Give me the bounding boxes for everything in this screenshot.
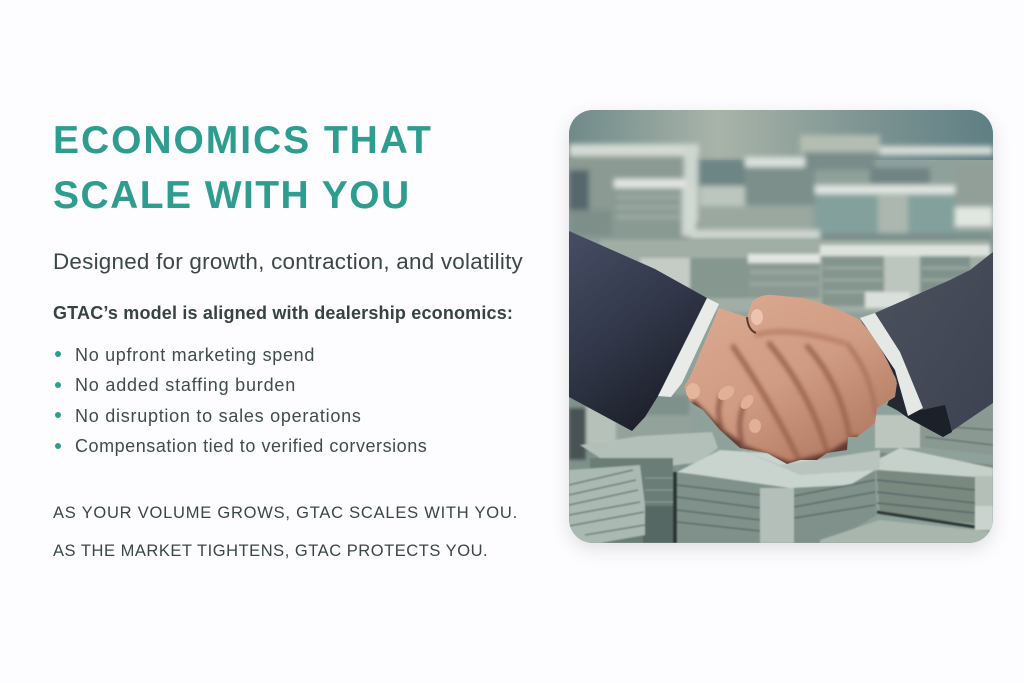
right shirt cuff [860, 313, 923, 416]
soft finger shading [690, 332, 876, 468]
closing statement: volume: AS YOUR VOLUME GROWS, GTAC SCALES WITH YOU. [53, 504, 518, 522]
bullet list: No upfront marketing spend [75, 345, 315, 365]
bullet list: No disruption to sales operations [75, 406, 362, 426]
clasped hands [684, 295, 897, 468]
right sleeve [860, 252, 993, 437]
blurred background [569, 110, 993, 543]
subtitle: Designed for growth, contraction, and volatility [53, 249, 523, 274]
left sleeve [569, 231, 707, 431]
bullet list: No added staffing burden [75, 375, 296, 395]
photo panel: handshake over stacks of cash [569, 110, 993, 543]
title: SCALE WITH YOU [53, 174, 411, 217]
left shirt cuff [658, 298, 719, 397]
closing statement: market: AS THE MARKET TIGHTENS, GTAC PROTECTS YOU. [53, 542, 488, 560]
title: ECONOMICS THAT [53, 119, 433, 162]
intro text: GTAC’s model is aligned with dealership economics: [53, 303, 513, 323]
bullet list: Compensation tied to verified corversions [75, 436, 427, 456]
bullet list [55, 345, 427, 456]
title [53, 119, 433, 217]
lower cash stacks [569, 405, 993, 543]
